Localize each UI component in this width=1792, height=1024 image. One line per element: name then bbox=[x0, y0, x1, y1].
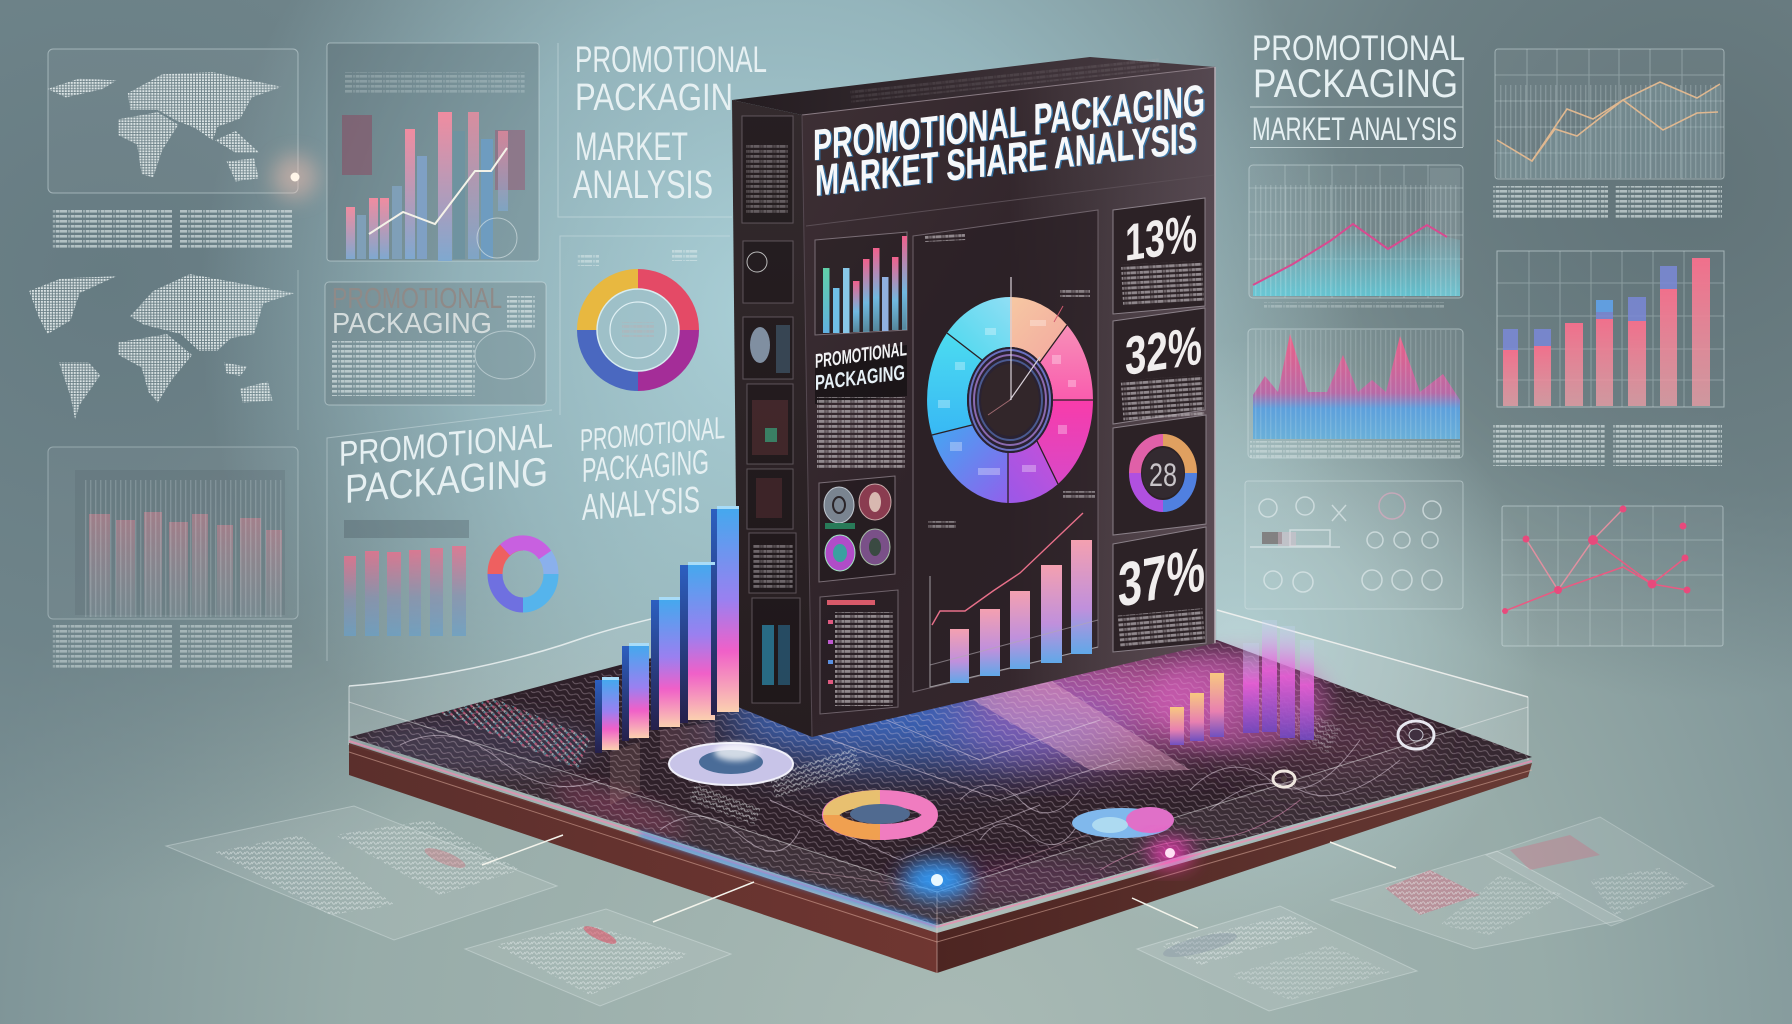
title: promotional packaging market share analysis: PROMOTIONAL PACKAGING bbox=[814, 76, 1206, 171]
box top face bbox=[732, 57, 1215, 115]
KPI card: 13% bbox=[1113, 198, 1205, 314]
heading: promotional packaging market analysis, top right bbox=[1250, 29, 1465, 148]
pie chart: market share bbox=[927, 277, 1093, 503]
3D bar chart bbox=[595, 506, 739, 805]
platform left side bbox=[349, 743, 937, 973]
panel: donut chart bbox=[560, 236, 730, 415]
package box bbox=[732, 57, 1215, 737]
title: promotional packaging market share analysis: PROMOTIONAL PACKAGING bbox=[813, 76, 1205, 170]
heading: promotional packaging analysis bbox=[580, 410, 725, 528]
donut on platform bbox=[830, 798, 930, 832]
heading: promotional packaging market analysis, top center: MARKET bbox=[575, 125, 688, 169]
KPI card: 37% bbox=[1113, 527, 1206, 652]
KPI card: 13%: 13% bbox=[1125, 204, 1197, 273]
label: chart heading bbox=[925, 232, 965, 242]
subheading: promotional packaging on box: PROMOTIONAL bbox=[815, 338, 907, 373]
title: promotional packaging market share analysis: MARKET SHARE ANALYSIS bbox=[816, 114, 1198, 207]
KPI card: 32% bbox=[1113, 308, 1205, 424]
mini bar chart bbox=[815, 232, 907, 335]
chart: pink network line chart bbox=[1502, 506, 1723, 646]
heading: promotional packaging market analysis, top right: PROMOTIONAL bbox=[1252, 29, 1465, 68]
heading: promotional packaging market analysis, top center: PACKAGIN bbox=[575, 77, 733, 119]
chart trend line bbox=[369, 148, 507, 234]
heading: promotional packaging dim: PACKAGING bbox=[332, 308, 492, 340]
disc: lavender on platform bbox=[669, 743, 793, 785]
KPI card: 32%: 32% bbox=[1125, 315, 1202, 387]
panel: mixed bar and line chart bbox=[327, 43, 539, 261]
KPI card: donut: 28 bbox=[1149, 457, 1177, 493]
disc: blue and pink blob bbox=[1072, 807, 1174, 838]
text block: box list bbox=[820, 590, 898, 714]
text block: faded chart notes bbox=[52, 625, 292, 670]
heading: promotional packaging, lower left card: PROMOTIONAL bbox=[339, 416, 553, 474]
glow: pink and blue highlights bbox=[903, 839, 1192, 898]
heading: promotional packaging, lower left card: PACKAGING bbox=[345, 450, 548, 512]
title: promotional packaging market share analysis: MARKET SHARE ANALYSIS bbox=[815, 113, 1197, 206]
panel: spike area chart bbox=[1248, 329, 1463, 458]
heading: promotional packaging market analysis, top right: PACKAGING bbox=[1253, 62, 1458, 106]
platform top surface bbox=[349, 640, 1532, 973]
floor card: right bbox=[1331, 851, 1623, 949]
heading: promotional packaging analysis: PROMOTIONAL bbox=[580, 410, 725, 458]
panel: world map top left bbox=[48, 49, 298, 193]
platform bbox=[349, 640, 1532, 973]
text block: box description bbox=[817, 397, 905, 468]
bar chart: lower left card bbox=[344, 520, 469, 636]
glass wall: rear left and right bbox=[349, 600, 1528, 760]
map: continents bbox=[48, 72, 282, 182]
panel: icon grid bbox=[1245, 481, 1463, 609]
title: promotional packaging market share analysis bbox=[813, 76, 1206, 207]
map: dotted world bbox=[29, 274, 294, 419]
text block: line chart notes bbox=[1493, 186, 1722, 220]
heading: promotional packaging, lower left card bbox=[327, 410, 553, 661]
KPI card: 37%: 37% bbox=[1118, 534, 1205, 621]
panel frame: central chart bbox=[913, 210, 1098, 692]
heading: promotional packaging market analysis, top center: PROMOTIONAL bbox=[575, 39, 767, 80]
KPI card: donut bbox=[1113, 415, 1206, 535]
panel: world map middle left bbox=[29, 270, 298, 430]
lens flare bbox=[273, 155, 317, 199]
bar and line chart on box bbox=[928, 491, 1098, 687]
floor card: center left bbox=[465, 909, 731, 1006]
icon: colored ring bbox=[495, 543, 551, 605]
text block: map notes bbox=[52, 210, 292, 250]
floor card: center right bbox=[1137, 906, 1417, 1011]
heading: promotional packaging market analysis, top center bbox=[558, 39, 767, 217]
box left side bbox=[732, 100, 812, 737]
trend line bbox=[932, 513, 1083, 625]
subheading: promotional packaging on box: PACKAGING bbox=[815, 361, 905, 395]
text block: bar chart notes bbox=[1493, 424, 1722, 466]
icon: small platform eye center bbox=[1273, 771, 1295, 787]
heading: promotional packaging dim: PROMOTIONAL bbox=[332, 283, 502, 315]
heading: promotional packaging market analysis, top center: ANALYSIS bbox=[573, 163, 713, 207]
trend line bbox=[1253, 224, 1447, 285]
floor card: far right bbox=[1486, 817, 1714, 926]
box front face bbox=[802, 67, 1215, 737]
floor card: left bbox=[166, 806, 557, 940]
neon bars: rear right bbox=[1150, 620, 1330, 750]
heading: promotional packaging dim bbox=[332, 283, 502, 340]
pie center hub bbox=[967, 347, 1053, 453]
leader lines bbox=[482, 835, 1396, 928]
heading: promotional packaging analysis: PACKAGING bbox=[582, 443, 709, 490]
glass front rim bbox=[349, 702, 1528, 933]
heading: promotional packaging analysis: ANALYSIS bbox=[582, 478, 700, 528]
icon: small platform eye right bbox=[1398, 721, 1434, 749]
heading: promotional packaging market analysis, top right: MARKET ANALYSIS bbox=[1252, 111, 1457, 147]
panel: double line chart bbox=[1495, 49, 1724, 179]
bar chart: stacked pink bars bbox=[1497, 251, 1724, 407]
icons: four badges bbox=[819, 476, 895, 582]
subheading: promotional packaging on box bbox=[815, 338, 907, 404]
panel: promotional packaging dim card bbox=[325, 282, 546, 405]
panel: faded bar chart bbox=[48, 447, 298, 619]
panel: teal line chart bbox=[1249, 165, 1463, 309]
platform right side bbox=[937, 763, 1532, 973]
